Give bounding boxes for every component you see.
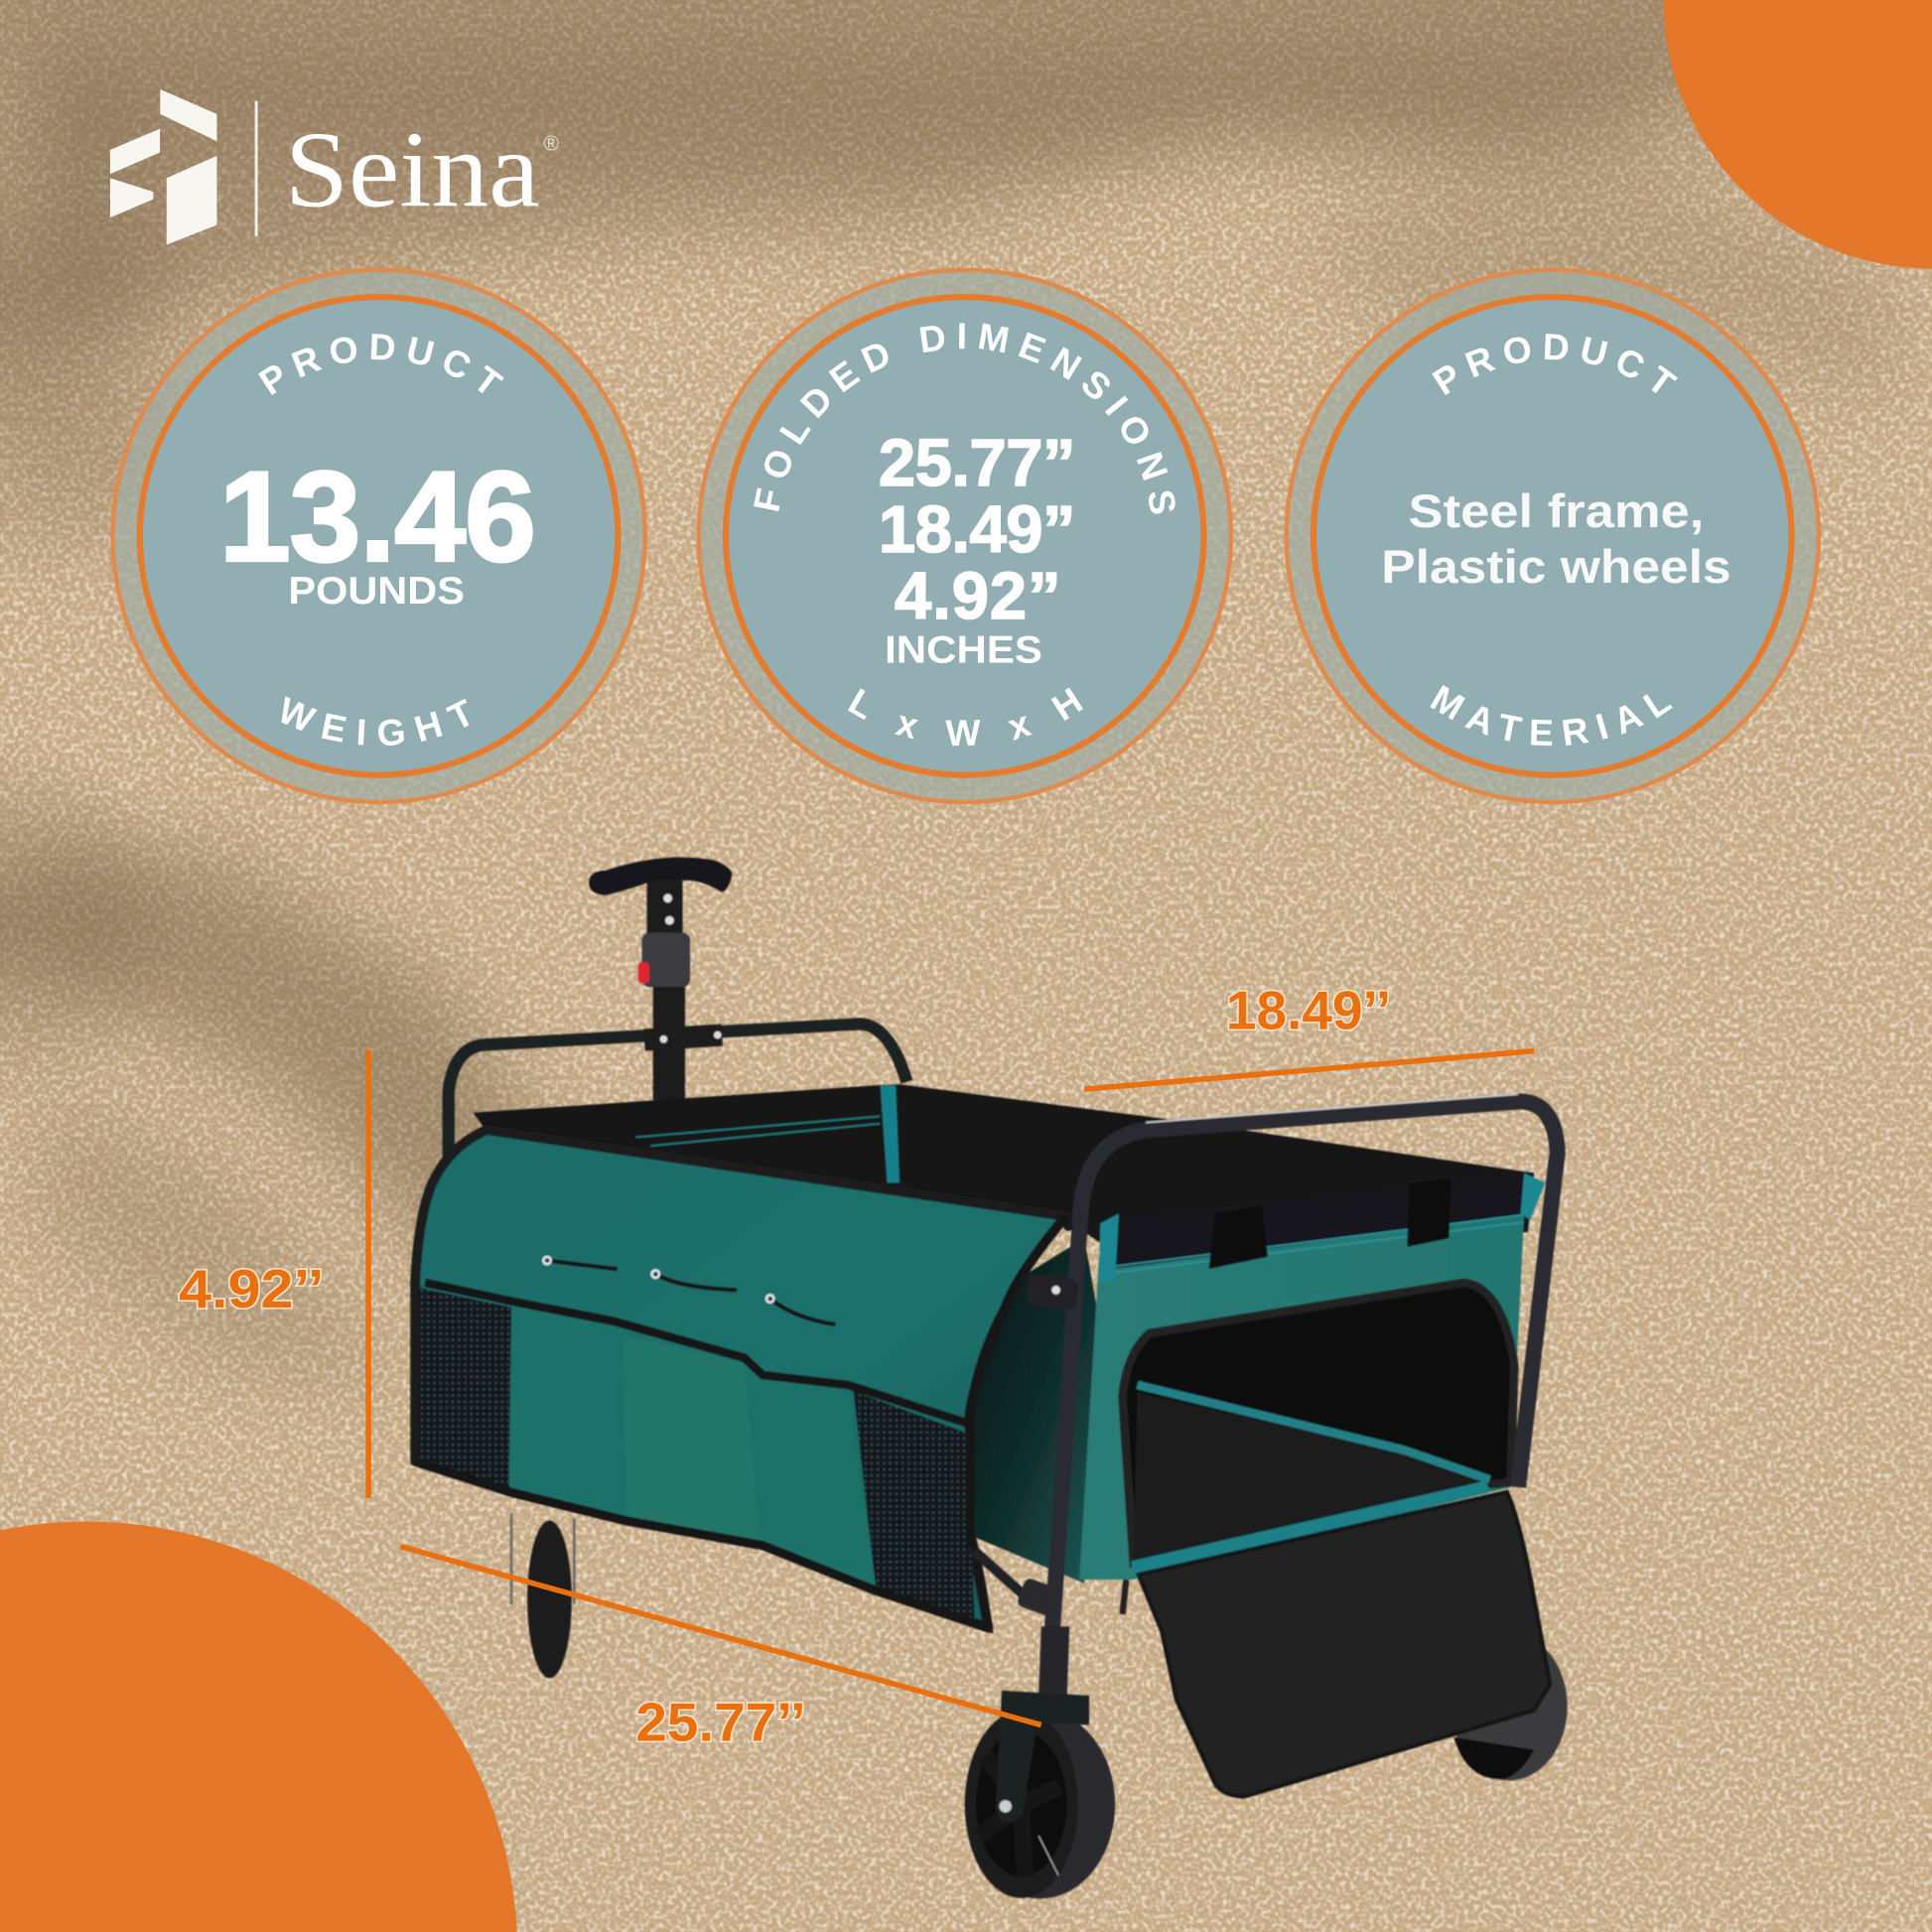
orange corner circle: top right (1663, 0, 1932, 269)
door flap (1139, 1492, 1550, 1796)
curved label: material: MATERIAL (1430, 685, 1672, 746)
front side panel (415, 1130, 1066, 1627)
material text: Plastic wheels (1381, 540, 1731, 593)
interior: black liner (474, 1084, 1534, 1244)
dimension line: width (1084, 1051, 1534, 1089)
rear wheel: right (1451, 1632, 1568, 1780)
dark gap behind the front panel (961, 1238, 1097, 1584)
dimension label: 4.92: 4.92’’ (179, 1259, 324, 1319)
dimension label: 25.77: 25.77’’ (635, 1693, 806, 1753)
badge disc (140, 297, 618, 775)
logo mark (110, 89, 216, 244)
side panel (1079, 1173, 1545, 1580)
pull handle (589, 857, 732, 1100)
logo: Seina (110, 89, 559, 244)
material text: Steel frame, (1409, 484, 1704, 537)
badge: product weight (110, 268, 647, 804)
zipper pull (1123, 1580, 1126, 1614)
material text (1381, 484, 1731, 593)
side frame (975, 1094, 1558, 1686)
weight value: 13.46 (219, 446, 536, 589)
badge disc (1313, 297, 1792, 775)
mesh pocket: right (854, 1391, 975, 1621)
curved label: L x W x H: L x W x H (848, 687, 1083, 747)
door opening (1123, 1283, 1514, 1578)
logo wordmark: Seina (285, 109, 540, 229)
mesh pocket: left (418, 1288, 511, 1492)
fabric pocket: right (747, 1374, 876, 1589)
dimension values: 4.92” (895, 559, 1061, 633)
dimension values: 18.49” (879, 492, 1075, 567)
badge disc (726, 297, 1204, 775)
pocket binding (425, 1283, 967, 1423)
dimension values: 25.77” (879, 426, 1075, 500)
panel body (415, 1130, 1066, 1627)
dimension unit: INCHES (885, 629, 1042, 672)
badge ring (1287, 270, 1819, 802)
registered mark: ® (543, 132, 559, 155)
badge ring (699, 270, 1231, 802)
rear wheel: left (511, 1513, 574, 1678)
storage cords (543, 1257, 835, 1324)
wagon illustration (415, 857, 1568, 1898)
weight unit: POUNDS (288, 570, 465, 613)
orange corner circle: bottom left (0, 1522, 517, 1932)
dimension line: length (400, 1547, 1041, 1725)
badge: product material (1285, 268, 1821, 804)
fabric pocket: left (510, 1304, 625, 1520)
fabric pocket: middle (622, 1335, 760, 1544)
front wheel fork (996, 1626, 1089, 1823)
badge: folded dimensions (697, 268, 1233, 804)
curved label: folded dimensions: FOLDED DIMENSIONS (754, 324, 1175, 514)
badge ring (113, 270, 645, 802)
panel edge (415, 1216, 1066, 1627)
curved label: product: PRODUCT (258, 334, 504, 395)
curved label: weight: WEIGHT (282, 696, 469, 746)
dimension line: height (366, 1049, 370, 1498)
curved label: product: PRODUCT (1432, 334, 1678, 395)
dimension values (879, 426, 1075, 633)
dimension label: 18.49: 18.49’’ (1226, 980, 1391, 1040)
interior: teal seam (635, 1116, 880, 1146)
interior: teal strap (881, 1085, 899, 1182)
rear rail (449, 1024, 906, 1165)
logo divider (255, 101, 258, 236)
front wheel (965, 1711, 1115, 1898)
